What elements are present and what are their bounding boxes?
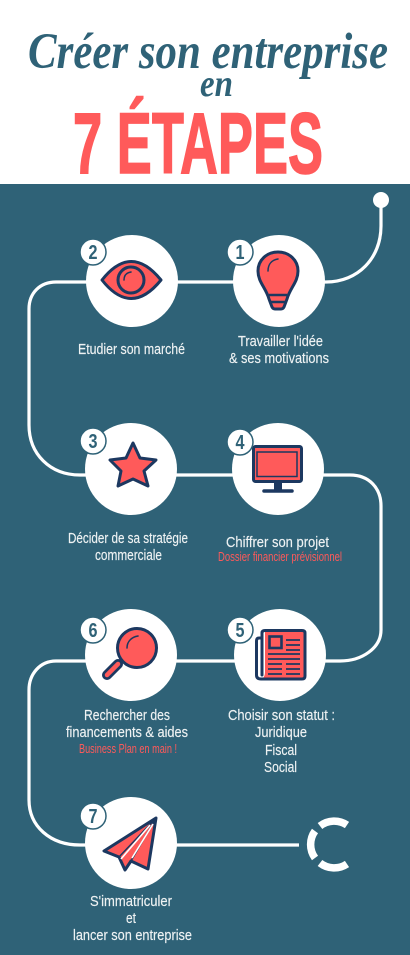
step 3: strategy [68, 423, 188, 564]
label: rechercher: financements & aides [66, 724, 188, 741]
icon: newspaper [256, 630, 305, 679]
badge 3: 3 [88, 431, 98, 453]
label: choisir: Social [264, 759, 297, 776]
step 7: register [73, 797, 192, 944]
label: etudier: Etudier son marché [78, 341, 185, 358]
label: chiffrer: Dossier financier prévisionnel [218, 550, 342, 564]
badge 7: 7 [88, 806, 98, 828]
step 4: budget [218, 423, 342, 564]
icon: eye [102, 262, 161, 298]
badge 2: 2 [88, 242, 98, 264]
icon: monitor [254, 446, 302, 491]
label: choisir: Choisir son statut : [228, 707, 335, 724]
icon: paper plane [104, 818, 156, 870]
step 5: legal status [227, 609, 335, 776]
step 6: funding [66, 609, 188, 756]
label: travailler: & ses motivations [229, 350, 329, 367]
badge 7 [80, 803, 106, 829]
label: travailler [229, 333, 329, 367]
badge 5: 5 [236, 620, 244, 642]
badge 1: 1 [236, 242, 244, 264]
label: decider: commerciale [95, 547, 162, 564]
label: travailler: Travailler l'idée [238, 333, 323, 350]
label: choisir: Juridique [255, 724, 307, 741]
label: chiffrer: Chiffrer son projet [226, 534, 330, 551]
label: rechercher [66, 707, 188, 756]
badge 4 [227, 429, 253, 455]
label: decider [68, 530, 188, 564]
header panel [0, 0, 410, 184]
badge 6 [80, 617, 106, 643]
badge 4: 4 [236, 432, 245, 454]
badge 5 [227, 617, 253, 643]
logo: C mark [311, 821, 347, 868]
label: immatriculer [73, 893, 192, 944]
timeline path [29, 200, 381, 845]
title [28, 24, 388, 192]
label: rechercher: Rechercher des [84, 707, 170, 724]
step 2: study the market [78, 235, 185, 358]
icon: light bulb [258, 252, 298, 309]
title: en [200, 63, 233, 105]
label: choisir [228, 707, 335, 776]
label: rechercher: Business Plan en main ! [79, 742, 177, 756]
icon: magnifying glass [107, 628, 156, 675]
label: immatriculer: lancer son entreprise [73, 927, 192, 944]
icon: star [110, 443, 156, 486]
timeline start dot [373, 192, 389, 208]
badge 6: 6 [88, 620, 98, 642]
step 1: the idea [227, 235, 329, 367]
label: chiffrer [218, 534, 342, 564]
label: immatriculer: et [126, 910, 137, 927]
label: immatriculer: S'immatriculer [90, 893, 172, 910]
label: decider: Décider de sa stratégie [68, 530, 188, 547]
label: choisir: Fiscal [265, 742, 297, 759]
badge 3 [80, 428, 106, 454]
